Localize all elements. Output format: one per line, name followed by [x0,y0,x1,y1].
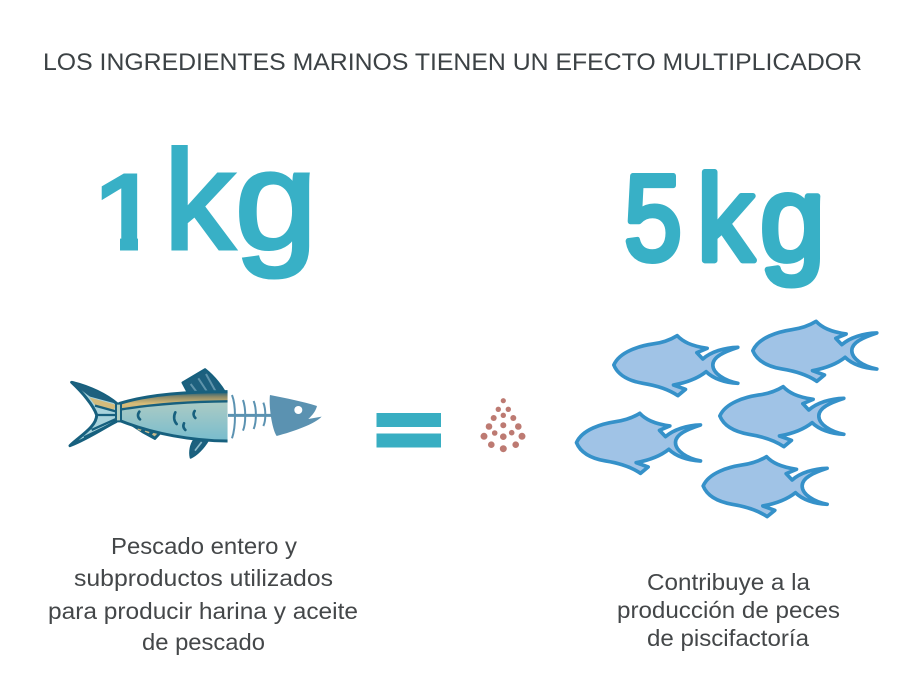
side line [122,401,228,409]
gold back band [120,392,228,409]
heading: 1kg: g [235,122,317,278]
body [120,392,228,441]
fish 5 [703,457,827,517]
text: right description: Contribuye a la [647,569,810,595]
white cut-off edge [228,388,231,443]
text: left description [48,533,358,655]
text: left description: para producir harina y aceite [48,598,358,624]
heading: 5kg: k [697,150,755,286]
icon: equals sign [376,413,441,448]
icon: drop of fish meal pellets [480,398,526,452]
heading: 5kg: g [760,150,825,286]
text: right description [617,569,840,651]
icon: fish half whole, half skeleton [70,369,322,458]
lower belly fin [132,425,162,439]
text: left description: de pescado [142,629,265,655]
heading: 1kg: k [164,122,235,278]
title: LOS INGREDIENTES MARINOS TIENEN UN EFECTO MULTIPLICADOR [43,49,862,76]
eye [294,406,302,414]
lower rear fin [190,440,208,458]
text: left description: Pescado entero y [111,533,298,559]
tail joint [116,404,121,421]
text: right description: de piscifactoría [647,625,809,651]
skeleton head [270,395,322,436]
icon: school of five fish [576,321,877,517]
heading: 1kg: 1 [92,154,162,272]
scale marks [138,411,195,430]
heading: 1kg [85,122,317,278]
text: right description: producción de peces [617,597,840,623]
fish 4 [576,413,700,473]
heading: 5kg: 5 [624,150,682,286]
body outline [120,392,228,441]
skeleton spine and ribs [228,395,273,438]
top fin [183,369,226,393]
text: left description: subproductos utilizados [74,565,333,591]
heading: 5kg [624,150,825,286]
fish 1 [614,336,738,396]
tail [70,382,117,446]
fish 3 [720,387,844,447]
fish 2 [753,321,877,381]
